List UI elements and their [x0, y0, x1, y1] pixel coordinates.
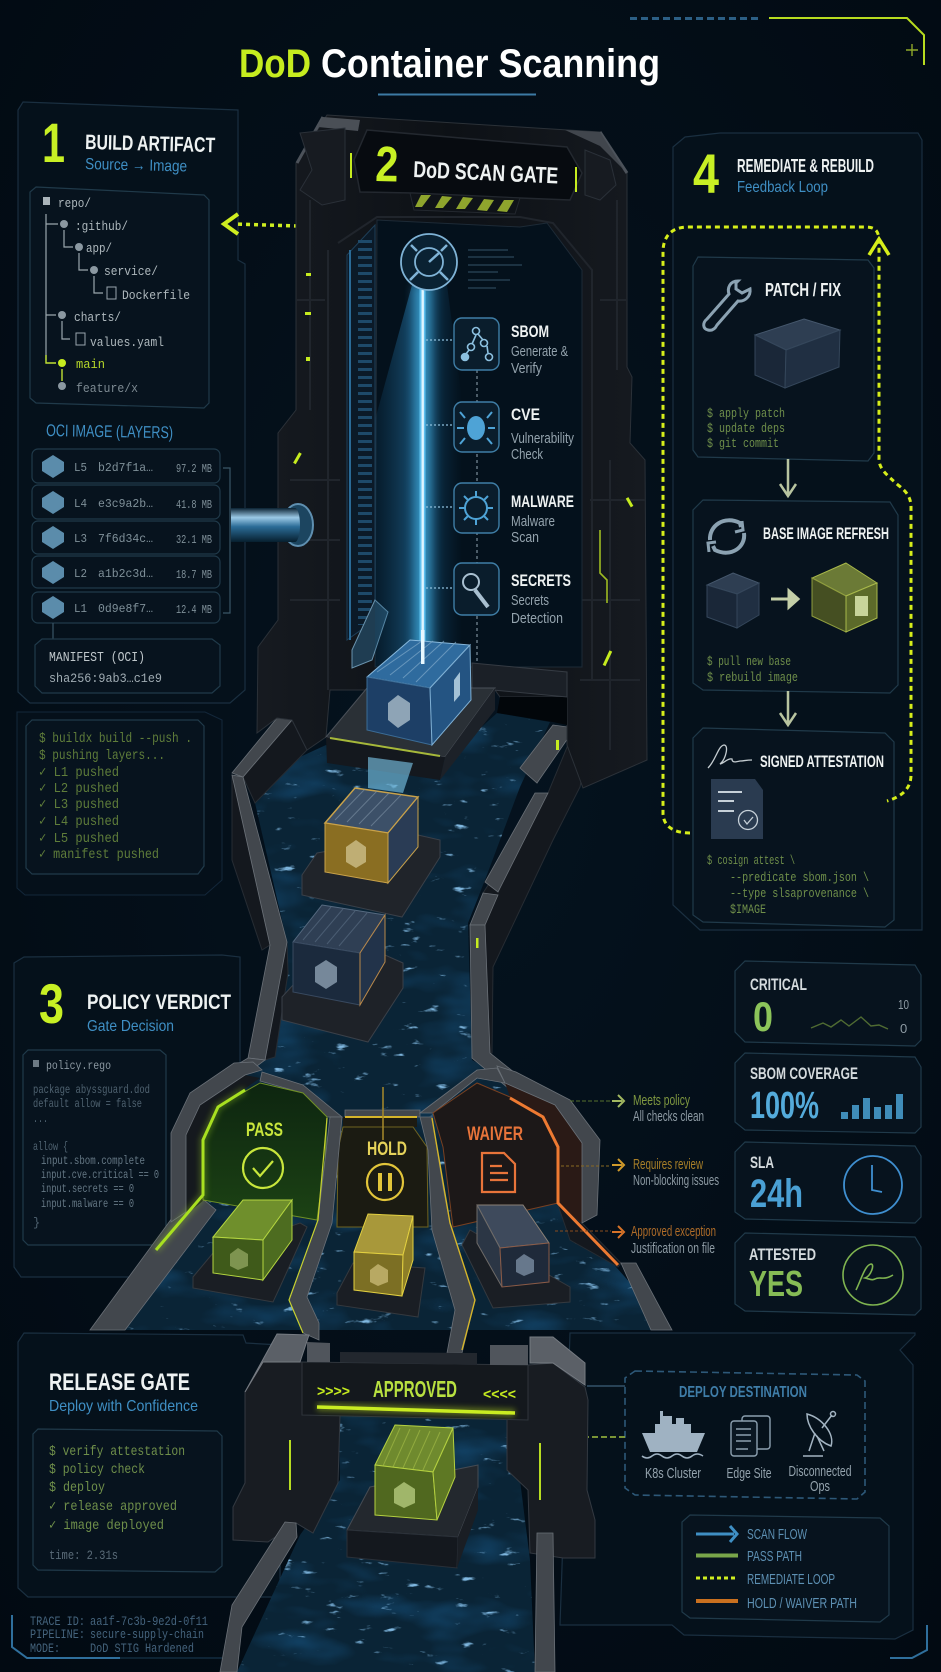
container: approved — [375, 1425, 455, 1520]
card: signed attestation: --predicate sbom.json \ — [730, 870, 869, 885]
icon: pause circle — [367, 1164, 403, 1200]
metric: SBOM coverage: 100% — [750, 1085, 819, 1127]
subheading: gate decision: Gate Decision — [87, 1018, 174, 1035]
legend: SCAN FLOW — [747, 1526, 808, 1543]
deploy destination: Disconnected — [788, 1463, 852, 1480]
layers list — [32, 449, 230, 639]
arch: waiver: WAIVER — [467, 1124, 523, 1145]
release log: $ policy check — [49, 1462, 145, 1478]
check: SBOM — [454, 318, 568, 377]
trace info: MODE: — [30, 1641, 60, 1656]
subheading: source to image: Source → Image — [85, 156, 187, 175]
container: pass green — [213, 1200, 292, 1280]
check: CVE: Vulnerability — [511, 430, 574, 447]
container: waiver grey — [477, 1205, 549, 1287]
manifest box: MANIFEST (OCI) — [49, 650, 145, 666]
code: policy rego: ... — [33, 1112, 48, 1126]
code: policy rego: input.sbom.complete — [41, 1154, 145, 1168]
verdict notes: Justification on file — [631, 1240, 715, 1257]
arch: pass — [156, 1062, 342, 1250]
check: SBOM: Verify — [511, 360, 542, 377]
card: patch fix: $ apply patch — [707, 406, 785, 421]
lower water channel — [238, 1416, 534, 1672]
trace info: secure-supply-chain — [90, 1627, 204, 1642]
light spill — [368, 757, 413, 793]
arch: hold: HOLD — [367, 1139, 407, 1160]
layers list: L3 — [74, 532, 87, 546]
card: signed attestation: --type slsaprovenance \ — [730, 886, 869, 901]
code: policy rego: input.malware == 0 — [41, 1197, 134, 1211]
repo tree — [30, 187, 209, 408]
card: signed attestation: $IMAGE — [730, 902, 766, 917]
icon: server — [731, 1416, 770, 1456]
release log — [33, 1429, 222, 1572]
trace info: DoD STIG Hardened — [90, 1641, 194, 1656]
metric: critical: CRITICAL — [750, 975, 807, 994]
scan beam — [414, 285, 431, 650]
gate frame — [257, 115, 647, 788]
verdict notes: All checks clean — [633, 1108, 704, 1125]
title — [239, 42, 660, 94]
repo tree: main — [76, 357, 105, 372]
container: dark — [293, 905, 385, 1005]
card: signed attestation — [693, 728, 894, 927]
release log: $ verify attestation — [49, 1444, 185, 1460]
arch: pass: PASS — [246, 1120, 283, 1141]
panel: build log: ✓ L3 pushed — [39, 797, 119, 813]
layers list: 0d9e8f7… — [98, 602, 153, 616]
release gate structure: <<<< — [483, 1386, 516, 1403]
dividers — [289, 1117, 475, 1353]
arch: waiver — [420, 1066, 618, 1265]
platform: approved — [347, 1465, 478, 1568]
release log: ✓ release approved — [49, 1499, 177, 1515]
scan ledge — [472, 663, 567, 697]
repo tree: feature/x — [76, 381, 138, 396]
repo tree: Dockerfile — [122, 288, 190, 303]
layers list: 41.8 MB — [176, 498, 212, 512]
trace info: TRACE ID: — [30, 1614, 85, 1629]
layers list: 18.7 MB — [176, 568, 212, 582]
legend: REMEDIATE LOOP — [747, 1571, 835, 1588]
deploy destination: Ops — [810, 1478, 830, 1495]
left pillar cap — [245, 1334, 309, 1392]
verdict notes: Requires review — [633, 1156, 703, 1173]
icon: check circle — [243, 1148, 283, 1188]
card: patch fix: $ update deps — [707, 421, 785, 436]
repo tree: service/ — [104, 264, 158, 279]
metric: attested: YES — [749, 1263, 803, 1304]
metric: SBOM coverage — [735, 1053, 921, 1133]
card: base image refresh: $ pull new base — [707, 654, 791, 669]
repo tree: :github/ — [75, 219, 128, 234]
panel: build log: $ pushing layers... — [39, 748, 165, 764]
check: secrets: SECRETS — [511, 571, 571, 590]
metric: critical: 10 — [898, 997, 909, 1012]
card: base image refresh: $ rebuild image — [707, 670, 798, 685]
code: policy rego: default allow = false — [33, 1097, 142, 1111]
legend: PASS PATH — [747, 1548, 802, 1565]
heading: release gate: RELEASE GATE — [49, 1369, 190, 1396]
manifest box — [35, 639, 220, 693]
verdict notes: Approved exception — [631, 1223, 716, 1240]
panel: build log: $ buildx build --push . — [39, 731, 192, 747]
layers list: 32.1 MB — [176, 533, 212, 547]
icon: signature seal — [843, 1245, 903, 1305]
panel: policy verdict — [14, 955, 240, 1277]
release log: ✓ image deployed — [49, 1518, 164, 1534]
panel: release gate — [18, 1333, 280, 1597]
layers list: a1b2c3d… — [98, 567, 153, 581]
icon: document — [711, 779, 763, 839]
panel: build log: ✓ manifest pushed — [39, 847, 159, 863]
code: policy rego — [23, 1050, 166, 1245]
panel: build artifact — [18, 102, 245, 703]
corner decoration — [630, 18, 924, 65]
step number 3: 3 — [39, 972, 64, 1035]
layers list: 7f6d34c… — [98, 532, 153, 546]
hazard stripes — [415, 195, 514, 212]
check: CVE — [454, 402, 574, 463]
metric: critical — [735, 961, 921, 1046]
icon: scan target — [401, 234, 457, 290]
card: signed attestation: SIGNED ATTESTATION — [760, 752, 884, 771]
repo tree: charts/ — [74, 310, 121, 325]
layers list: L1 — [74, 602, 87, 616]
arrow: patch to base refresh — [780, 459, 796, 496]
panel: build log: ✓ L4 pushed — [39, 814, 119, 830]
step number 1: 1 — [42, 111, 65, 174]
check: SBOM: Generate & — [511, 343, 568, 360]
metric: critical: 0 — [900, 1021, 907, 1036]
icon: ship — [642, 1411, 705, 1458]
arch: hold — [337, 1087, 428, 1227]
panel: build log: ✓ L2 pushed — [39, 781, 119, 797]
manifest box: sha256:9ab3…c1e9 — [49, 671, 162, 686]
card: patch fix: PATCH / FIX — [765, 280, 841, 300]
release gate structure: >>>> — [317, 1383, 350, 1400]
trace info — [12, 1614, 222, 1658]
metric: critical: 0 — [753, 993, 773, 1040]
arrow: old to new — [771, 591, 798, 607]
metric: SLA: 24h — [750, 1172, 803, 1216]
step number 2: 2 — [375, 136, 399, 193]
card: signed attestation: $ cosign attest \ — [707, 853, 795, 868]
platforms in basin — [193, 1223, 570, 1317]
release log: $ deploy — [49, 1480, 105, 1496]
heading: OCI image layers: OCI IMAGE (LAYERS) — [46, 421, 173, 442]
check: SBOM: SBOM — [511, 322, 549, 341]
deploy destination: DEPLOY DESTINATION — [679, 1384, 807, 1401]
check: secrets — [454, 563, 571, 627]
verdict notes — [555, 1092, 719, 1257]
heading: remediate and rebuild: REMEDIATE & REBUILD — [737, 156, 874, 176]
heading: DoD scan gate: DoD SCAN GATE — [413, 156, 559, 189]
metric: SLA — [735, 1142, 921, 1223]
code: policy rego: input.cve.critical == 0 — [41, 1168, 159, 1182]
icon: wrench — [704, 281, 750, 330]
card: patch fix: $ git commit — [707, 436, 779, 451]
layers list: 97.2 MB — [176, 462, 212, 476]
check: secrets: Secrets — [511, 592, 549, 609]
card: base image refresh — [693, 500, 898, 693]
right pillar — [507, 1363, 595, 1558]
check: malware: Malware — [511, 513, 555, 530]
icon: new container — [812, 563, 877, 632]
icon: signature — [708, 745, 752, 768]
code: policy rego: input.secrets == 0 — [41, 1182, 134, 1196]
icon: old container — [707, 573, 759, 628]
repo tree: repo/ — [58, 196, 91, 211]
subheading: deploy with confidence: Deploy with Confidence — [49, 1398, 198, 1415]
trace info: PIPELINE: — [30, 1627, 85, 1642]
platform: dark — [282, 955, 403, 1042]
lower basin walls — [90, 1200, 672, 1330]
layers list: L2 — [74, 567, 87, 581]
metric: SLA: SLA — [750, 1153, 774, 1172]
legend — [682, 1515, 889, 1622]
crossbar — [302, 1362, 528, 1420]
title: DoD — [239, 42, 311, 86]
panel: build log: ✓ L1 pushed — [39, 765, 119, 781]
channel walls — [232, 718, 585, 1088]
approved sign: APPROVED — [373, 1376, 457, 1402]
layers list: 12.4 MB — [176, 603, 212, 617]
left pillar — [233, 1362, 340, 1542]
legend: HOLD / WAIVER PATH — [747, 1595, 857, 1612]
lower channel walls — [220, 1522, 555, 1672]
arrow: back to build artifact — [224, 214, 298, 234]
repo tree: app/ — [86, 241, 112, 256]
deploy destination: Edge Site — [726, 1465, 772, 1482]
release log: time: 2.31s — [49, 1548, 118, 1563]
arrow: remediate loop — [663, 227, 911, 833]
container: gold — [325, 788, 418, 883]
icon: satellite dish — [803, 1412, 836, 1456]
check: secrets: Detection — [511, 610, 563, 627]
arrow: base refresh to attestation — [780, 691, 796, 725]
container: scanning blue — [367, 630, 471, 745]
water channel — [126, 713, 650, 1330]
code: policy rego: allow { — [33, 1140, 68, 1154]
layers list: b2d7f1a… — [98, 461, 153, 475]
check: malware: Scan — [511, 529, 539, 546]
deploy destination — [587, 1371, 865, 1499]
platform: gold — [302, 835, 440, 917]
metric: attested — [735, 1233, 921, 1315]
icon: document — [482, 1153, 515, 1192]
icon: refresh — [708, 520, 744, 553]
corner bracket — [890, 1625, 927, 1658]
repo tree: values.yaml — [90, 335, 164, 350]
deploy destination: K8s Cluster — [645, 1465, 701, 1482]
check: CVE: CVE — [511, 405, 540, 424]
step number 4: 4 — [693, 142, 719, 205]
small gate markers — [293, 273, 633, 948]
verdict notes: Non-blocking issues — [633, 1172, 719, 1189]
check: CVE: Check — [511, 446, 543, 463]
heading: policy verdict: POLICY VERDICT — [87, 991, 231, 1014]
icon: container — [755, 319, 840, 388]
check: malware: MALWARE — [511, 492, 574, 511]
gate header plate — [351, 130, 582, 214]
metric: attested: ATTESTED — [749, 1245, 816, 1264]
container: hold yellow — [354, 1214, 413, 1296]
panel: build log: ✓ L5 pushed — [39, 831, 119, 847]
release gate structure — [233, 1334, 595, 1558]
trace info: aa1f-7c3b-9e2d-0f11 — [90, 1614, 208, 1629]
metric: SBOM coverage: SBOM COVERAGE — [750, 1064, 858, 1083]
code: policy rego: policy.rego — [46, 1059, 111, 1073]
panel: remediate and rebuild — [673, 133, 922, 930]
heading: build artifact: BUILD ARTIFACT — [85, 131, 216, 157]
code: policy rego: package abyssguard.dod — [33, 1083, 150, 1097]
code: policy rego: } — [33, 1216, 40, 1230]
layers list: e3c9a2b… — [98, 497, 153, 511]
panel: deploy and legend — [560, 1333, 915, 1639]
card: patch fix — [693, 257, 874, 461]
right pillar cap — [530, 1337, 585, 1385]
scan chamber screen — [347, 220, 582, 668]
icon: clock — [844, 1156, 902, 1214]
platform: scan — [326, 688, 495, 780]
layers list: L4 — [74, 497, 87, 511]
subheading: feedback loop: Feedback Loop — [737, 179, 828, 196]
check: malware — [454, 483, 574, 546]
verdict notes: Meets policy — [633, 1092, 690, 1109]
title: Container Scanning — [321, 42, 660, 86]
inlet pipe — [231, 504, 313, 546]
panel: build log — [17, 712, 222, 895]
layers list: L5 — [74, 461, 87, 475]
